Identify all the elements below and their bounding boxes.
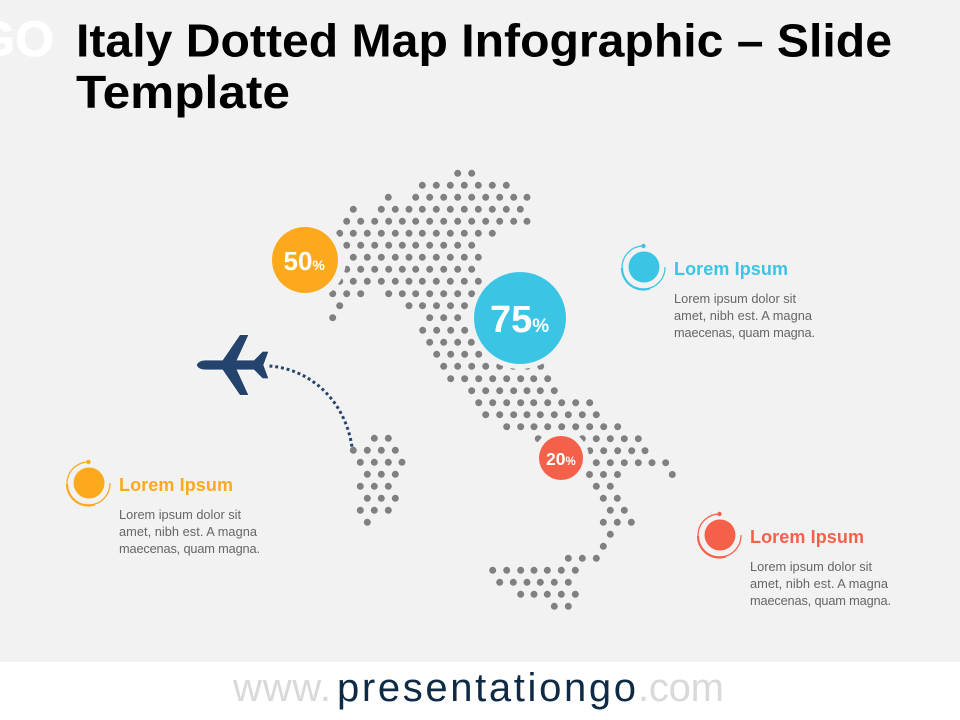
badge: 50 percent: 50% bbox=[284, 246, 325, 276]
text block bbox=[119, 507, 260, 556]
badge: 75 percent: 75% bbox=[490, 299, 549, 341]
footer website text: presentationgo bbox=[337, 666, 636, 710]
badge: 20 percent bbox=[533, 430, 589, 486]
text block: amet, nibh est. A magna bbox=[119, 524, 258, 539]
title: Italy Dotted Map Infographic – Slide bbox=[76, 14, 892, 66]
text block: Lorem ipsum dolor sit bbox=[119, 507, 241, 522]
text block: amet, nibh est. A magna bbox=[750, 576, 889, 591]
heading: Lorem Ipsum bbox=[674, 259, 788, 279]
heading: Lorem Ipsum bbox=[750, 527, 864, 547]
text block bbox=[750, 559, 891, 608]
text block: Lorem ipsum dolor sit bbox=[674, 291, 796, 306]
callout: blue bbox=[622, 244, 815, 340]
heading: Lorem Ipsum bbox=[119, 475, 233, 495]
footer website text: www. bbox=[232, 666, 331, 710]
icon: airplane bbox=[197, 335, 268, 395]
badge: 50 percent bbox=[264, 219, 346, 301]
title bbox=[76, 14, 892, 118]
text block: Lorem ipsum dolor sit bbox=[750, 559, 872, 574]
arrow: dotted flight path bbox=[270, 366, 352, 447]
text block bbox=[674, 291, 815, 340]
dots: mainland south bbox=[503, 423, 676, 562]
text block: maecenas, quam magna. bbox=[674, 325, 815, 340]
dots: mainland centre bbox=[419, 327, 600, 418]
icon: orange ring marker bbox=[67, 460, 110, 506]
icon: blue ring marker bbox=[622, 244, 665, 290]
icon: red ring marker bbox=[698, 512, 741, 558]
title: Template bbox=[76, 66, 290, 118]
dots: mainland north bbox=[329, 170, 530, 321]
text block: amet, nibh est. A magna bbox=[674, 308, 813, 323]
dots: Sardinia bbox=[350, 435, 406, 526]
footer band bbox=[0, 662, 960, 720]
text block: maecenas, quam magna. bbox=[119, 541, 260, 556]
text block: maecenas, quam magna. bbox=[750, 593, 891, 608]
callout: red bbox=[698, 512, 891, 608]
callout: orange bbox=[67, 460, 260, 556]
badge: 75 percent bbox=[469, 267, 571, 369]
dotted map of Italy bbox=[329, 170, 676, 610]
footer website text bbox=[232, 666, 724, 710]
dots: Sicily bbox=[489, 567, 579, 610]
footer website text: .com bbox=[638, 666, 724, 710]
badge: 20 percent: 20% bbox=[546, 449, 576, 469]
